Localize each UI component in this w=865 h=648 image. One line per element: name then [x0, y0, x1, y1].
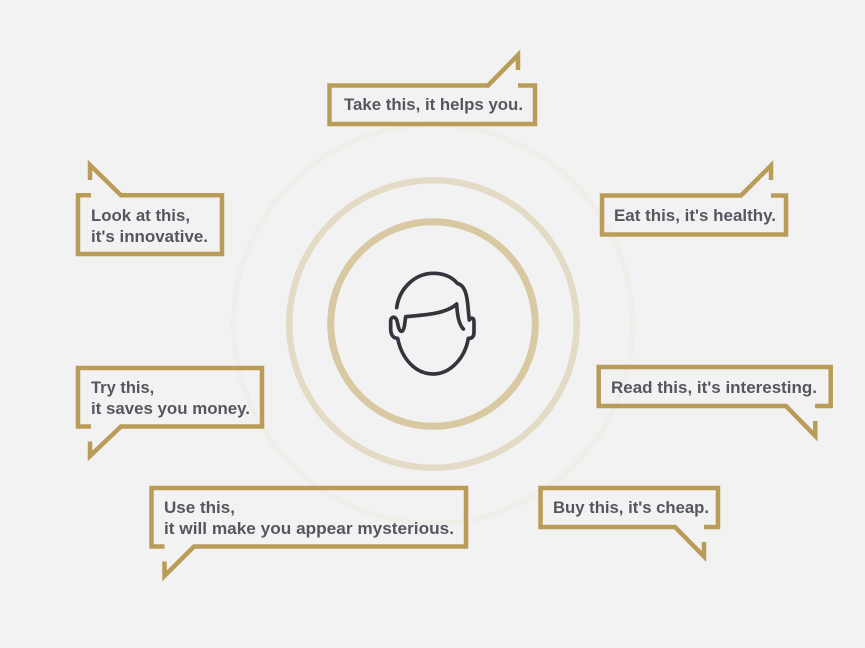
concentric rings	[234, 124, 632, 524]
callout text: Use this,	[164, 499, 235, 517]
icon: head outline	[391, 273, 474, 374]
callout: take this	[330, 55, 535, 124]
callout outline	[602, 166, 786, 234]
callout: buy this	[540, 488, 718, 556]
callout text: it will make you appear mysterious.	[164, 520, 454, 538]
callout: try this	[78, 368, 262, 456]
callout text: Read this, it's interesting.	[611, 379, 817, 397]
callout text: Look at this,	[91, 207, 190, 225]
callout text: it's innovative.	[91, 228, 208, 246]
callout text: Eat this, it's healthy.	[614, 207, 776, 225]
middle ring	[289, 180, 577, 468]
callout: use this	[152, 488, 466, 576]
callout: read this	[599, 367, 831, 436]
callout text: Try this,	[91, 379, 154, 397]
callout outline	[78, 165, 222, 254]
callout outline	[599, 367, 831, 436]
callout text: it saves you money.	[91, 400, 250, 418]
callout text: Take this, it helps you.	[344, 96, 523, 114]
callout: eat this	[602, 166, 786, 234]
callout outline	[540, 488, 718, 556]
callout: look at this	[78, 165, 222, 254]
callout text: Buy this, it's cheap.	[553, 499, 709, 517]
callout outline	[330, 55, 535, 124]
outer ring	[234, 124, 632, 524]
callout outline	[78, 368, 262, 456]
callout outline	[152, 488, 466, 576]
inner ring	[331, 222, 535, 426]
